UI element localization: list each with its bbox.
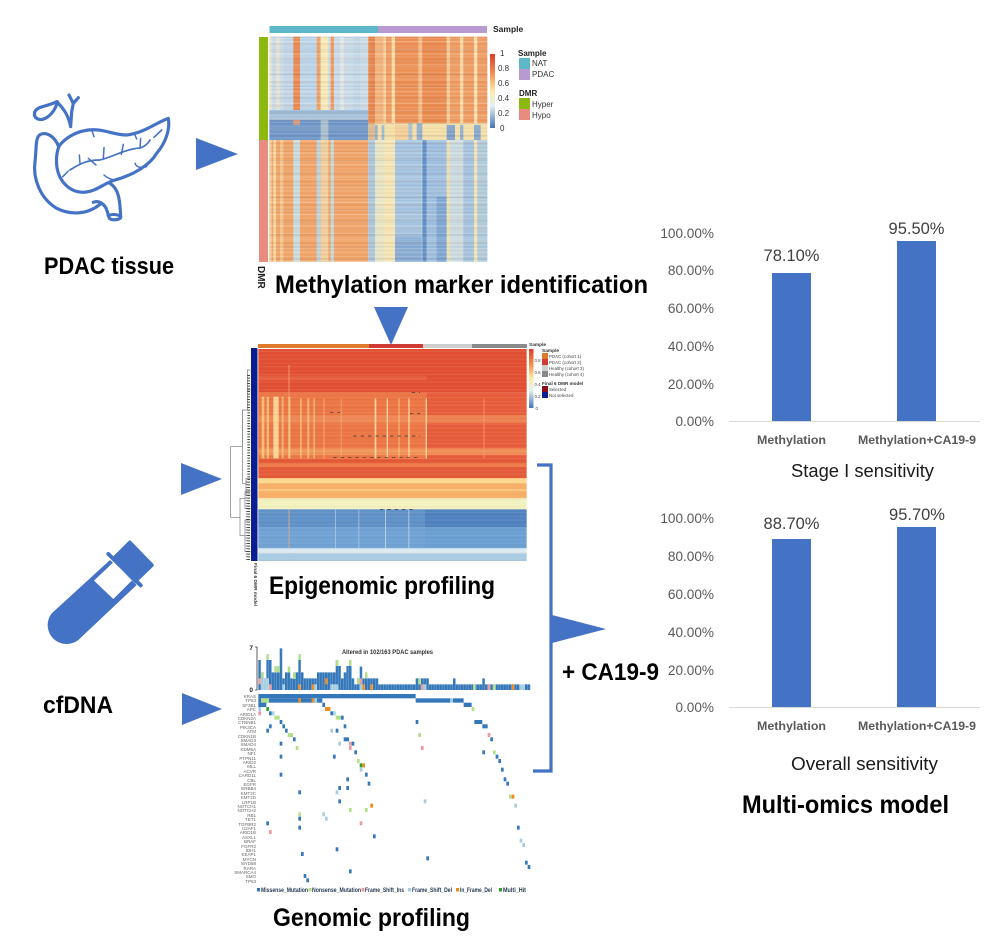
gene labels: RB1	[247, 813, 256, 818]
bar: methylation 88.70%	[772, 539, 811, 707]
mutation matrix	[258, 694, 530, 882]
colour scale: 0.8	[498, 64, 510, 73]
y axis labels: 100.00%	[660, 511, 714, 526]
colour scale: 1	[500, 49, 505, 58]
gene labels: TP63	[245, 879, 256, 884]
colour scale: 0.2	[534, 394, 541, 399]
gene labels: NF1	[247, 751, 256, 756]
value: 95.50%: 95.50%	[889, 220, 945, 238]
gene labels: EGFR	[243, 782, 257, 787]
colour scale	[490, 49, 510, 133]
gene labels: KDM6A	[240, 747, 256, 752]
y axis labels: 60.00%	[668, 587, 714, 602]
gene labels: KMT2D	[241, 795, 257, 800]
label: Sample: Sample	[529, 342, 546, 348]
y axis labels: 20.00%	[668, 377, 714, 392]
gene labels: TET1	[245, 817, 256, 822]
chart title: Overall sensitivity: Overall sensitivity	[791, 754, 938, 774]
gene labels	[234, 694, 257, 884]
legend: sample and DMR: Hypo	[532, 111, 551, 120]
y axis labels	[660, 226, 714, 429]
icon: pancreas organ	[34, 95, 169, 220]
gene labels: MYD88	[241, 861, 256, 866]
gene labels: SMARCA4	[234, 870, 256, 875]
y axis labels: 40.00%	[668, 625, 714, 640]
gene labels: ARID2	[243, 760, 256, 765]
arrow: to multi-omics model	[552, 615, 606, 643]
legend: cohorts and DMR model: PDAC (cohort 2)	[549, 360, 582, 365]
gene labels: MYCN	[243, 857, 256, 862]
axis: mutation count: 7	[249, 645, 253, 652]
bar chart: stage I sensitivity	[660, 220, 980, 481]
gene labels: CDKN1B	[238, 734, 256, 739]
legend: mutation types: Multi_Hit	[503, 887, 527, 894]
label: DMR rotated: DMR	[255, 266, 266, 290]
category labels: Methylation	[757, 721, 826, 733]
gene labels: SF3B1	[242, 703, 256, 708]
text: cfDNA label: cfDNA	[43, 692, 113, 719]
title: altered samples: Altered in 102/163 PDAC samples	[342, 649, 433, 656]
legend: sample and DMR: DMR	[519, 89, 537, 98]
colour scale: 0	[500, 124, 505, 133]
legend: mutation types: Missense_Mutation	[261, 887, 308, 894]
gene labels: NOTCH2	[237, 808, 256, 813]
sample annotation bar	[258, 344, 527, 348]
heatmap: epigenomic profiling	[231, 342, 584, 606]
arrow: cfDNA to genomic profiling	[182, 693, 222, 725]
gene labels: U2AF1	[242, 826, 256, 831]
gene labels: BRAF	[244, 839, 256, 844]
arrow: tissue to methylation heatmap	[196, 138, 238, 170]
gene labels: PTPN11	[239, 756, 256, 761]
legend: cohorts and DMR model	[542, 348, 584, 398]
legend: cohorts and DMR model: Sample	[542, 348, 559, 354]
legend: mutation types: Nonsense_Mutation	[312, 887, 361, 894]
y axis labels	[660, 511, 714, 715]
axis: mutation count: 0	[249, 687, 253, 694]
gene labels: ARID1A	[240, 712, 256, 717]
category labels: Methylation	[757, 435, 826, 447]
legend: mutation types: In_Frame_Del	[460, 887, 492, 894]
gene labels: PIK3CA	[240, 725, 256, 730]
gene labels: MLL	[247, 764, 256, 769]
heading: methylation marker identification: Methylation marker identification	[275, 271, 648, 299]
y axis labels: 20.00%	[668, 663, 714, 678]
stacked mutation bars	[258, 647, 532, 690]
gene labels: APC	[247, 707, 257, 712]
gene labels: CARD11	[239, 773, 256, 778]
bar: methylation+CA19-9 95.70%	[897, 527, 936, 707]
heading: epigenomic profiling: Epigenomic profiling	[269, 572, 495, 600]
value: 78.10%: 78.10%	[764, 247, 820, 265]
gene labels: SMO	[246, 874, 256, 879]
arrow: cfDNA to epigenomic profiling	[181, 463, 222, 495]
category labels: Methylation+CA19-9	[858, 435, 976, 447]
legend: sample and DMR	[518, 49, 554, 120]
gene labels: KRAS	[244, 694, 256, 699]
gene labels: CDKN2A	[238, 716, 256, 721]
gene labels: ACVR	[243, 769, 257, 774]
legend: mutation types: Frame_Shift_Ins	[365, 887, 404, 894]
label: Final 6 DMR model: Final 6 DMR model	[252, 563, 258, 606]
legend: cohorts and DMR model: PDAC (cohort 1)	[549, 354, 582, 359]
gene labels: ERBB4	[241, 786, 256, 791]
gene labels: ARID1B	[240, 830, 256, 835]
axis: mutation count	[249, 645, 257, 694]
text: PDAC tissue label: PDAC tissue	[44, 253, 174, 280]
bar: methylation 78.10%	[772, 273, 811, 421]
bracket: combine profiling layers	[533, 465, 551, 771]
legend: cohorts and DMR model: Healthy (cohort 4)	[549, 372, 584, 377]
text: plus CA19-9: + CA19-9	[562, 659, 659, 686]
legend: cohorts and DMR model: Final 6 DMR model	[542, 381, 583, 386]
gene labels: TGFBR2	[238, 822, 256, 827]
heading: multi-omics model: Multi-omics model	[742, 791, 949, 819]
DMR model annotation bar	[251, 348, 258, 561]
category labels: Methylation+CA19-9	[858, 721, 976, 733]
colour scale: 0.6	[498, 79, 510, 88]
sample annotation bar	[270, 26, 487, 33]
category labels	[757, 435, 976, 447]
bar: methylation+CA19-9 95.50%	[897, 241, 936, 421]
heatmap cells: methylation	[269, 37, 487, 262]
oncoplot: genomic profiling	[234, 645, 532, 894]
y axis labels: 60.00%	[668, 301, 714, 316]
gene labels: IDH1	[246, 848, 256, 853]
gene labels: SMAD4	[240, 742, 256, 747]
gene labels: LRP1B	[242, 800, 256, 805]
y axis labels: 80.00%	[668, 549, 714, 564]
gene labels: ATM	[247, 729, 256, 734]
heatmap cells: epigenomic	[258, 349, 527, 561]
y axis labels: 0.00%	[675, 414, 714, 429]
gene labels: CTNNB1	[238, 720, 256, 725]
colour scale: 0.8	[534, 358, 541, 363]
y axis labels: 40.00%	[668, 339, 714, 354]
gene labels: KEAP1	[241, 852, 256, 857]
gene labels: RARA	[243, 866, 256, 871]
label: Sample: Sample	[493, 24, 524, 34]
legend: mutation types: Frame_Shift_Del	[412, 887, 452, 894]
colour scale: 0.4	[498, 94, 510, 103]
gene labels: SMAD3	[240, 738, 256, 743]
value: 88.70%: 88.70%	[764, 515, 820, 533]
heading: genomic profiling: Genomic profiling	[273, 904, 470, 932]
y axis labels: 100.00%	[660, 226, 714, 241]
colour scale: 0.2	[498, 109, 510, 118]
arrow: methylation down to epigenomic	[374, 307, 408, 345]
bar chart: overall sensitivity	[660, 506, 980, 774]
DMR annotation bar	[259, 37, 268, 262]
heatmap: methylation marker identification	[255, 24, 554, 290]
colour scale: 0	[536, 406, 538, 411]
gene labels: ASXL1	[242, 835, 256, 840]
gene labels: KMT2C	[241, 791, 257, 796]
legend: cohorts and DMR model: Selected	[549, 387, 567, 392]
y axis labels: 80.00%	[668, 263, 714, 278]
dendrogram	[231, 370, 251, 562]
colour scale: 0.6	[534, 370, 541, 375]
legend: sample and DMR: Hyper	[532, 100, 554, 109]
colour scale	[529, 349, 541, 411]
gene labels: NOTCH1	[237, 804, 256, 809]
y axis labels: 0.00%	[675, 700, 714, 715]
gene labels: TP53	[245, 698, 256, 703]
chart title: Stage I sensitivity: Stage I sensitivity	[791, 461, 934, 481]
legend: sample and DMR: NAT	[532, 59, 548, 68]
colour scale: 0.4	[534, 382, 541, 387]
value: 95.70%: 95.70%	[889, 506, 945, 524]
icon: blood collection tube	[48, 540, 154, 644]
legend: mutation types	[257, 887, 527, 894]
legend: sample and DMR: Sample	[518, 49, 547, 58]
category labels	[757, 721, 976, 733]
legend: sample and DMR: PDAC	[532, 70, 554, 79]
gene labels: CBL	[247, 778, 256, 783]
gene labels: FGFR2	[241, 844, 256, 849]
legend: cohorts and DMR model: Not selected	[549, 393, 574, 398]
legend: cohorts and DMR model: Healthy (cohort 3)	[549, 366, 584, 371]
